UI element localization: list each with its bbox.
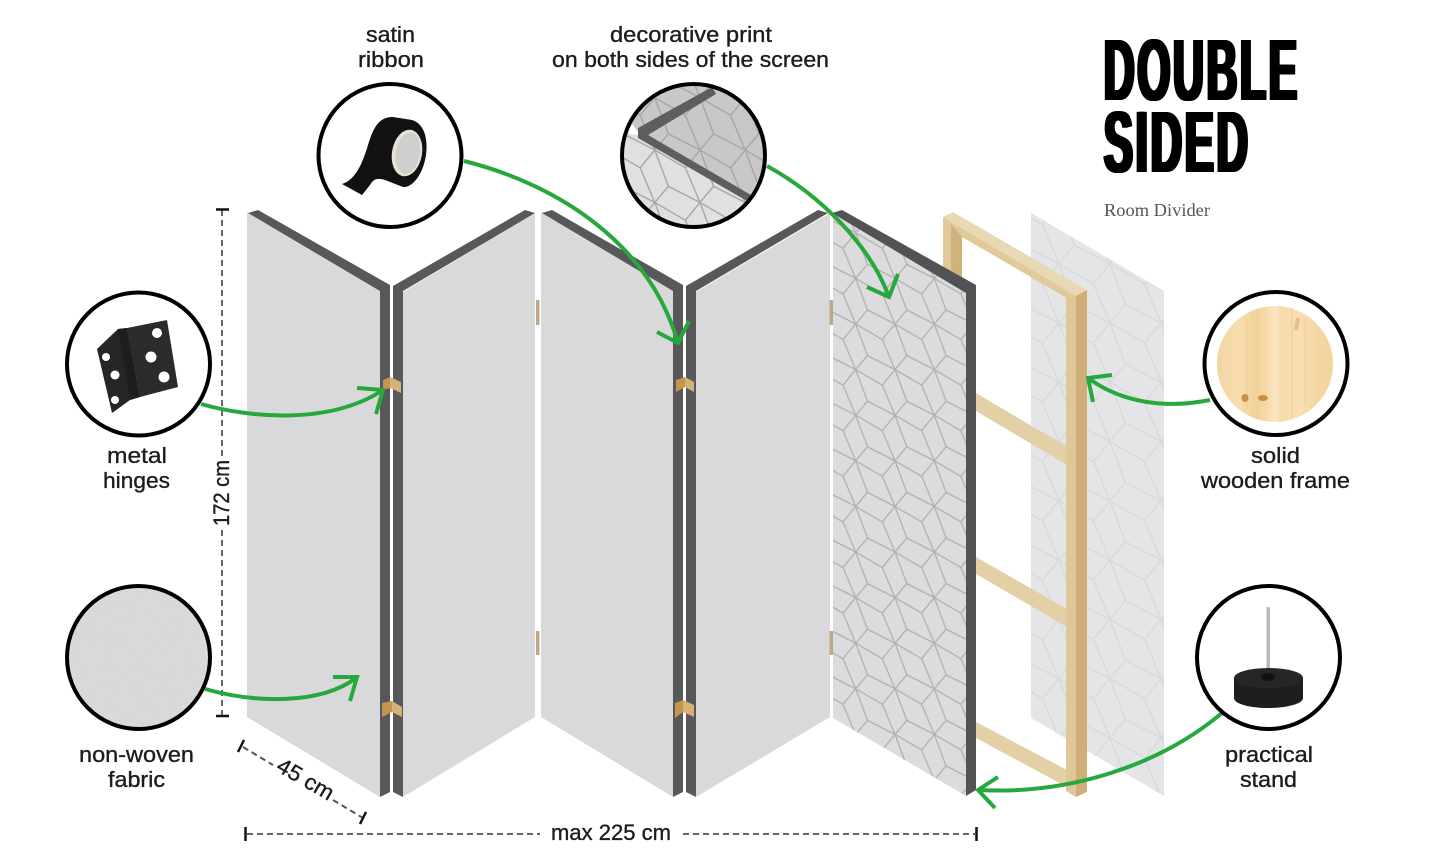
circle icon: solid wood bbox=[1204, 292, 1348, 435]
label: satin ribbon: satin bbox=[366, 22, 415, 47]
label: satin ribbon: ribbon bbox=[358, 47, 424, 72]
title: SIDED bbox=[1102, 94, 1248, 191]
label: practical stand bbox=[1225, 742, 1313, 792]
label: metal hinges bbox=[103, 443, 170, 493]
panel 1 bbox=[247, 210, 390, 797]
dimension: panel width bbox=[238, 740, 366, 824]
panel 4 bbox=[686, 210, 830, 797]
arrow: non-woven fabric bbox=[205, 677, 357, 701]
dimension: total width: max 225 cm bbox=[551, 820, 671, 845]
panel 3 bbox=[541, 210, 683, 797]
label: non-woven fabric: non-woven bbox=[79, 742, 194, 767]
small hinges bbox=[536, 300, 833, 655]
dimension: height bbox=[209, 210, 234, 716]
arrow: wooden frame bbox=[1088, 375, 1210, 404]
label: decorative print: on both sides of the screen bbox=[552, 47, 829, 72]
label: non-woven fabric: fabric bbox=[108, 767, 165, 792]
arrow: practical stand bbox=[978, 713, 1222, 808]
arrow: metal hinges bbox=[201, 388, 383, 415]
back printed sheet bbox=[1031, 213, 1164, 796]
label: solid wooden frame: wooden frame bbox=[1200, 468, 1350, 493]
dimension: panel width: 45 cm bbox=[272, 753, 339, 805]
label: non-woven fabric bbox=[79, 742, 194, 792]
label: solid wooden frame bbox=[1200, 443, 1350, 493]
circle icon: satin ribbon bbox=[318, 84, 462, 227]
subtitle: Room Divider bbox=[1104, 200, 1210, 220]
title: DOUBLE bbox=[1102, 22, 1298, 119]
label: decorative print: decorative print bbox=[610, 22, 772, 47]
cross rails of frame bbox=[976, 393, 1067, 787]
top rail of frame bbox=[943, 212, 1087, 298]
panel 2 bbox=[393, 210, 535, 797]
label: metal hinges: metal bbox=[107, 443, 167, 468]
dimension: total width bbox=[246, 820, 976, 845]
arrow: decorative print bbox=[767, 166, 898, 297]
circle icon: practical stand bbox=[1197, 586, 1340, 729]
left post of frame bbox=[943, 217, 962, 300]
wooden frame bbox=[943, 212, 1087, 797]
title bbox=[1102, 22, 1298, 191]
right post of frame bbox=[1066, 290, 1087, 797]
circle icon: non-woven fabric bbox=[65, 584, 212, 731]
label: practical stand: stand bbox=[1240, 767, 1297, 792]
dimension: height: 172 cm bbox=[209, 460, 234, 526]
label: solid wooden frame: solid bbox=[1251, 443, 1300, 468]
circle icon: decorative print bbox=[620, 82, 767, 229]
label: satin ribbon bbox=[358, 22, 424, 72]
circle icon: metal hinges bbox=[67, 292, 210, 436]
arrow: satin ribbon bbox=[464, 161, 689, 343]
panel 5 with cube print bbox=[832, 210, 976, 796]
label: practical stand: practical bbox=[1225, 742, 1313, 767]
label: decorative print bbox=[552, 22, 829, 72]
label: metal hinges: hinges bbox=[103, 468, 170, 493]
large hinges bbox=[382, 377, 694, 718]
